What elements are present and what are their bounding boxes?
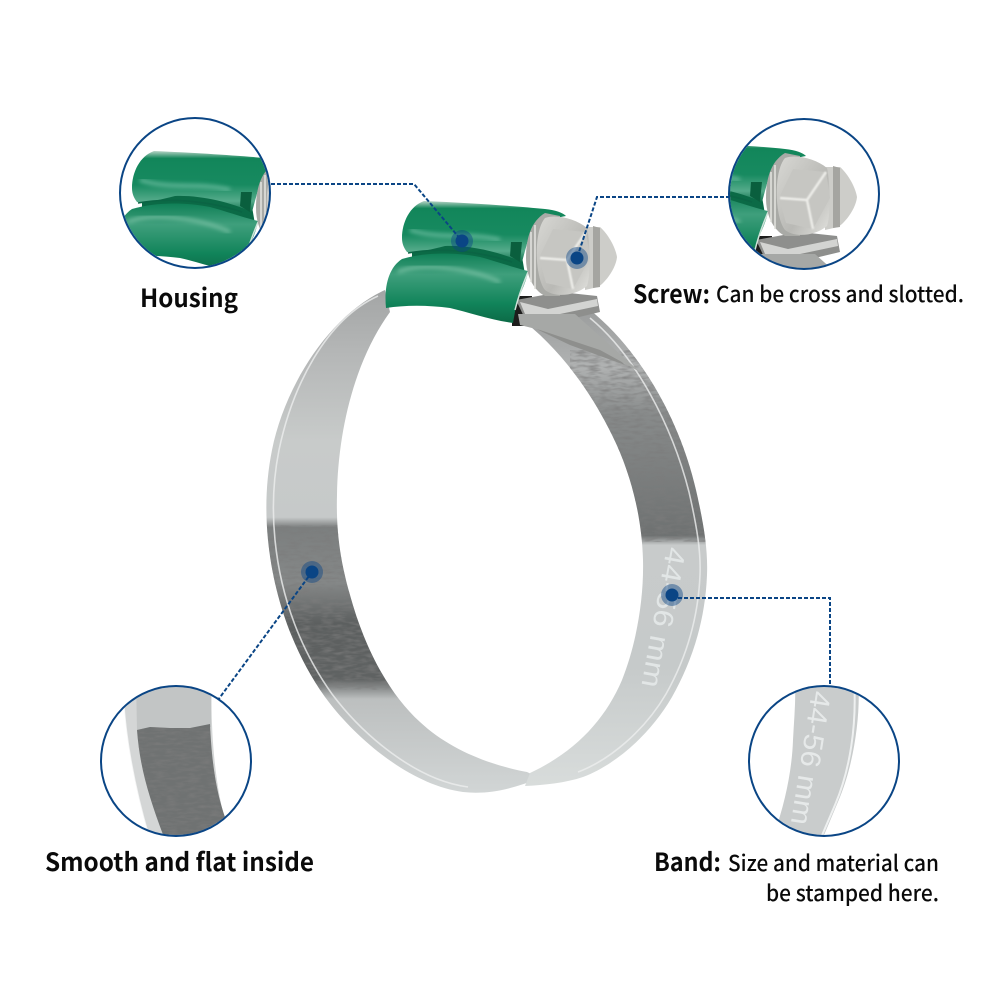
stamped size marking: 44-56 mm <box>635 545 692 690</box>
label: band <box>654 843 939 908</box>
inset circle: band stamping: 44-56 mm <box>785 689 837 827</box>
label: housing: Housing <box>140 279 238 315</box>
inset circle: smooth inside <box>101 680 251 842</box>
clamp housing and screw <box>386 201 640 372</box>
label: band: Size and material can <box>728 846 939 878</box>
label: band: Band: <box>654 843 721 879</box>
inset circle: band stamping <box>749 680 899 840</box>
marker dot: screw <box>566 247 588 269</box>
inset circle: housing <box>119 117 271 269</box>
marker dot: band <box>661 584 683 606</box>
clamp band <box>260 285 710 800</box>
marker dot: inside <box>301 561 323 583</box>
leader line: housing <box>271 184 462 241</box>
marker dot: housing <box>451 230 473 252</box>
leader line: smooth inside <box>218 572 312 700</box>
leader line: screw <box>577 197 730 258</box>
label: band: be stamped here. <box>766 876 939 908</box>
leader line: band <box>672 598 830 686</box>
label: smooth and flat inside: Smooth and flat inside <box>45 843 314 879</box>
label: screw: Can be cross and slotted. <box>716 277 964 309</box>
right band section <box>520 305 710 790</box>
left band section <box>260 285 545 800</box>
label: screw <box>633 275 964 311</box>
inset circle: screw <box>728 118 880 270</box>
label: screw: Screw: <box>633 275 710 311</box>
